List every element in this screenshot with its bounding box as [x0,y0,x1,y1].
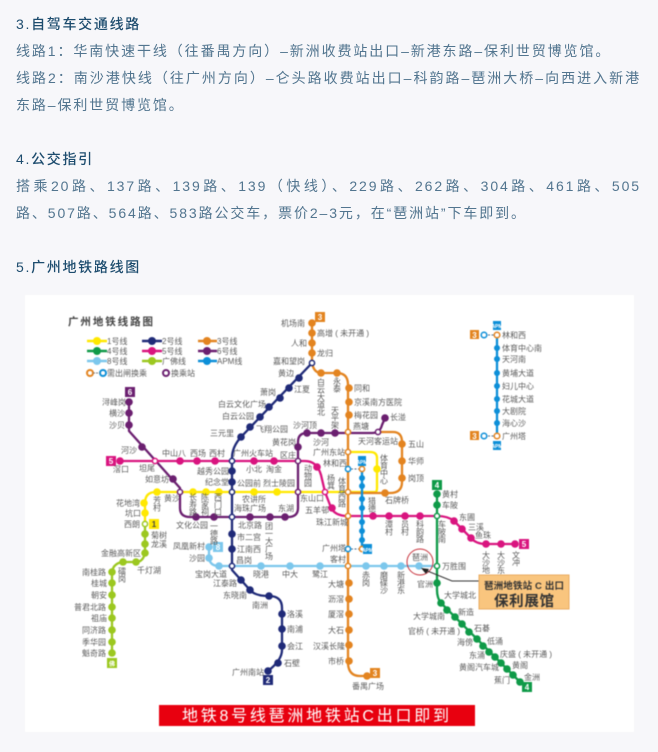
station labels: west and centre: 文化公园 [176,520,208,530]
station labels: west and centre: 淘金 [266,464,282,474]
station labels: west and centre: 白云公园 [222,411,254,421]
heading: bus guide: 4.公交指引 [16,151,94,167]
station labels: west and centre: 西朗 [124,519,140,529]
station labels: north and east: 番禺广场 [352,681,384,691]
legend: 4号线 [107,346,127,356]
line 4 [433,490,524,686]
station labels: west and centre: 区庄 [280,450,296,460]
station labels: north and east: 燕塘 [353,421,369,431]
station labels: west and centre: 南洲 [252,600,268,610]
APM line inset: 天河南 [502,354,526,364]
station labels: west and centre: 北京路 [238,520,262,530]
station labels: north and east: 黄村 [442,489,458,499]
station labels: west and centre: 芳村 [152,495,162,512]
line badges: 5 [109,457,114,466]
station labels: north and east: 猎德 [368,496,376,514]
station labels: north and east: 磨碟沙 [380,570,388,594]
heading: metro map: 5.广州地铁路线图 [16,259,141,275]
station labels: west and centre: 市二宫 [237,532,261,542]
station labels: north and east: 华师 [408,456,424,466]
APM line inset: 3 [472,432,477,441]
station labels: north and east: 长湴 [390,412,406,422]
line 6 [125,398,389,521]
legend: 1号线 [107,336,127,346]
line badges: 4 [435,481,440,490]
station labels: north and east: 大学城北 [444,590,476,600]
APM line inset [470,321,542,450]
line badges: 8 [216,543,221,552]
station labels: west and centre: 花地湾 [116,498,140,508]
line 5 [116,457,519,548]
station labels: north and east: 龙归 [317,348,333,358]
station labels: west and centre: 小北 [246,465,262,474]
station labels: north and east: 岗顶 [408,474,424,483]
station labels: north and east: 汉溪长隆 [313,641,345,651]
station labels: north and east: 万胜围 [442,561,466,571]
station labels: north and east: 大沙东 [496,550,506,574]
station labels: north and east: 杨箕 [326,473,336,491]
station labels: north and east: 潭村 [384,520,394,536]
station labels: north and east: 梅花园 [354,410,378,420]
station labels: north and east: 大学城南 [413,611,445,621]
line badges: 佛 [109,660,115,668]
callout: Poly exhibition hall: 琶洲地铁站 C 出口 [484,580,564,592]
station labels: west and centre: 海珠广场 [234,503,266,513]
APM line inset: 广州塔 [502,431,526,441]
APM line inset: 体育中心南 [502,343,542,353]
station labels: west and centre: 如意坊 [145,474,169,484]
APM line inset: 黄埔大道 [502,368,534,378]
station labels: north and east: 赤岗 [362,571,370,587]
station labels: west and centre: 凤凰新村 [173,541,205,551]
station labels: west and centre: 广州火车站 [233,448,273,458]
station labels: west and centre: 长寿路 [188,492,198,516]
station labels: north and east: 嘉和望岗 [273,356,305,366]
station labels: west and centre: 同济路 [82,625,106,635]
station labels: north and east: 京溪南方医院 [354,397,402,407]
station labels: north and east: 林和西 [323,458,347,468]
station labels: west and centre: 中山八 [162,448,186,458]
text: route 2 first line: 线路2：南沙港快线（往广州方向）–仑头路收费站出口–科韵路–琶洲大桥–向西进入新港 [16,70,641,86]
station labels: north and east: 沙河 [313,437,329,447]
station labels: north and east: 官洲 [417,579,433,589]
station labels: north and east: 黄阁 [512,660,528,670]
station labels: west and centre: 广州南站 [232,667,264,677]
station labels: west and centre: 祖庙 [91,613,107,623]
station labels: west and centre: 黄沙 [164,493,180,503]
arrow to Pazhou station [421,568,479,581]
station labels: north and east: 广州东站 [313,447,345,457]
station labels: north and east: 低涌 [487,636,503,646]
APM line inset: APM [491,444,503,450]
Pazhou station marker [407,549,433,575]
station labels: north and east: 天河客运站 [358,436,398,446]
APM line inset: 花城大道 [502,394,534,404]
station labels: north and east: 石碁 [474,623,490,633]
station labels: north and east: 车陂南 [438,519,446,543]
station labels: west and centre: 一德路 [210,522,218,545]
line badges [106,312,532,692]
station labels: north and east: 大塘 [328,579,344,589]
station labels: west and centre: 黄花岗 [272,437,296,447]
line badges: 2 [266,676,271,685]
line badges: APM [356,460,368,466]
station labels: west and centre: 宝岗大道 [195,569,227,579]
station labels: north and east: 动物园 [304,463,312,488]
line badges: 5 [522,540,527,549]
station labels: west and centre: 普君北路 [74,602,106,612]
station labels: north and east: 体育中心 [380,453,388,485]
station labels: north and east: 庆盛 ( 未开通 ) [500,649,552,659]
station labels: north and east: 人和 [291,339,307,348]
line 2 [228,363,312,675]
station labels: north and east: 海傍 [457,637,473,647]
legend: 2号线 [162,336,182,346]
station labels: west and centre: 纪念堂 [205,477,229,487]
station labels: west and centre: 团一大广场 [264,522,274,561]
heading: self-drive routes: 3.自驾车交通线路 [16,16,141,32]
station labels: north and east: 东圃 [459,512,475,522]
line badges: 1 [152,520,157,529]
red banner: 地铁8号线琶洲地铁站C出口即到 [182,707,449,725]
station labels: west and centre: 昌岗 [236,556,252,565]
station labels: west and centre: 飞翔公园 [256,424,288,434]
line 1 [140,452,381,524]
station labels: west and centre: 会江 [287,641,303,651]
station labels: west and centre: 东晓南 [223,590,247,600]
station labels: west and centre: 菊树 [151,530,167,540]
callout: Poly exhibition hall: 保利展馆 [494,592,554,610]
station labels: west and centre: 桂城 [91,578,107,588]
APM line inset: APM [491,324,503,330]
line 8 [205,543,437,570]
station labels: west and centre: 龙溪 [151,539,167,549]
legend: 3号线 [217,336,237,346]
station labels: west and centre: 金融高新区 [101,548,141,558]
line badges: 4 [525,683,530,692]
station labels: west and centre: 鹭江 [312,569,328,579]
station labels: west and centre: 东湖 [278,503,294,513]
station labels: north and east: 三溪 [468,522,484,532]
line badges: 6 [128,388,133,397]
text: bus routes first line: 搭乘20路、137路、139路、139（快线）、229路、262路、304路、461路、505 [16,178,641,194]
station labels: west and centre: 江南西 [237,544,261,554]
station labels: west and centre: 礌岗 [118,567,126,583]
station labels: west and centre: 南桂路 [82,567,106,577]
station labels: north and east: 黄阁汽车城 [459,662,499,672]
APM line inset: 海心沙 [502,418,526,428]
station labels: west and centre: 白云文化广场 [218,399,266,409]
station labels: west and centre: 沙园 [189,554,205,563]
interchange stations [142,360,440,569]
legend: APM线 [217,356,242,366]
legend: 换乘站 [171,368,195,378]
APM line inset: 妇儿中心 [502,381,534,391]
station labels: west and centre: 坑口 [125,508,141,518]
text: bus routes second line: 路、507路、564路、583路公交车，票价2–3元，在“琶洲站”下车即到。 [16,205,527,221]
station labels: north and east: 大沙地 [482,550,490,574]
station labels: west and centre: 黄边 [278,368,294,378]
station labels: west and centre: 三元里 [210,429,234,438]
text: route 2 second line: 东路–保利世贸博览馆。 [16,97,185,113]
station labels: west and centre [74,368,328,677]
legend: 广佛线 [162,356,186,366]
station labels: west and centre: 公园前 [237,478,261,488]
station labels: north and east: 官桥 ( 未开通 ) [408,626,460,636]
station labels: north and east: 东涌 [469,650,485,660]
station labels: west and centre: 中大 [282,569,298,579]
station labels: west and centre: 石壁 [284,658,300,668]
station labels: west and centre: 农讲所 [242,494,266,504]
station labels: west and centre: 洛溪 [287,609,303,619]
APM line main map [351,469,365,549]
station labels: north and east: 天平架 [330,406,340,430]
station labels: west and centre: 西门口 [214,493,222,516]
station labels: north and east: 客村 [330,554,346,564]
station labels: north and east: 沥滘 [328,595,344,604]
station labels: north and east: 五山 [408,439,424,449]
APM line inset: 林和西 [502,330,526,340]
station labels: west and centre: 季华园 [82,637,106,647]
APM line inset: 大剧院 [502,406,526,416]
station labels: north and east: 大石 [328,625,344,635]
station labels: north and east: 同和 [354,384,370,393]
station labels: west and centre: 千灯湖 [137,565,161,575]
station labels: west and centre: 晓港 [253,569,269,579]
station labels: north and east: 鱼珠 [475,530,491,540]
station labels: north and east: 市桥 [328,656,344,666]
map title: 广州地铁线路图 [68,315,153,328]
station labels: north and east: 白云大道北 [316,377,326,417]
text: route 1: 线路1：华南快速干线（往番禺方向）–新洲收费站出口–新港东路–保利世贸博览馆。 [16,43,611,59]
station labels: north and east: 金洲 [524,672,540,682]
station labels: north and east [273,318,552,691]
line badges: 3 [373,669,378,678]
station labels: west and centre: 横沙 [109,408,125,418]
station labels: north and east: 体育西路 [338,476,346,508]
red banner [159,705,475,726]
station labels: north and east: 新造 [458,607,474,617]
station labels: west and centre: 越秀公园 [197,466,229,476]
legend: 需出闸换乘 [107,368,147,378]
station labels: north and east: 石牌桥 [385,495,409,505]
station labels: north and east: 珠江新城 [316,517,348,527]
station labels: north and east: 蕉门 [494,675,510,685]
station labels: west and centre: 坦尾 [139,464,155,473]
station labels: north and east: 沙河顶 [293,420,317,430]
line 3 [308,319,406,680]
station labels: west and centre: 烈士陵园 [263,478,295,488]
legend: 6号线 [217,346,237,356]
line badges: 3 [318,313,323,322]
station labels: west and centre: 朝安 [91,590,107,600]
station labels: west and centre: 西村 [209,448,225,458]
station labels: north and east: 科韵路 [416,519,424,543]
legend: 5号线 [162,346,182,356]
station labels: west and centre: 魁奇路 [82,648,106,658]
station labels: north and east: 永泰 [332,376,342,393]
station labels: west and centre: 浔峰岗 [102,397,126,407]
station labels: north and east: 机场南 [281,318,305,328]
station labels: north and east: 广州塔 [322,543,346,553]
station labels: west and centre: 西场 [190,449,206,458]
station labels: west and centre: 东山口 [300,493,324,503]
station labels: west and centre: 萧岗 [260,387,276,397]
APM line inset: 3 [472,331,477,340]
station labels: north and east: 车陂 [442,500,458,510]
line badges: APM [362,548,373,554]
station labels: north and east: 厦滘 [328,610,344,619]
station labels: west and centre: 陈家祠 [200,492,210,517]
legend: 8号线 [107,356,127,366]
legend [87,336,242,378]
station labels: west and centre: 沙贝 [109,421,125,430]
station labels: north and east: 五羊邨 [305,505,329,515]
station labels: west and centre: 河沙 [121,445,137,455]
station labels: north and east: 新港东 [396,570,406,594]
station labels: north and east: 琶洲 [412,553,428,562]
station labels: west and centre: 南浦 [287,624,303,634]
callout: Poly exhibition hall [479,575,569,610]
station labels: west and centre: 滘口 [113,465,129,474]
station labels: north and east: 员村 [400,520,410,536]
station labels: north and east: 文冲 [512,550,520,568]
Guangfo line [108,526,149,657]
station labels: west and centre: 江夏 [294,385,310,394]
station labels: north and east: 高增 ( 未开通 ) [317,328,369,338]
station labels: west and centre: 江泰路 [213,578,237,588]
metro map panel [68,311,570,727]
